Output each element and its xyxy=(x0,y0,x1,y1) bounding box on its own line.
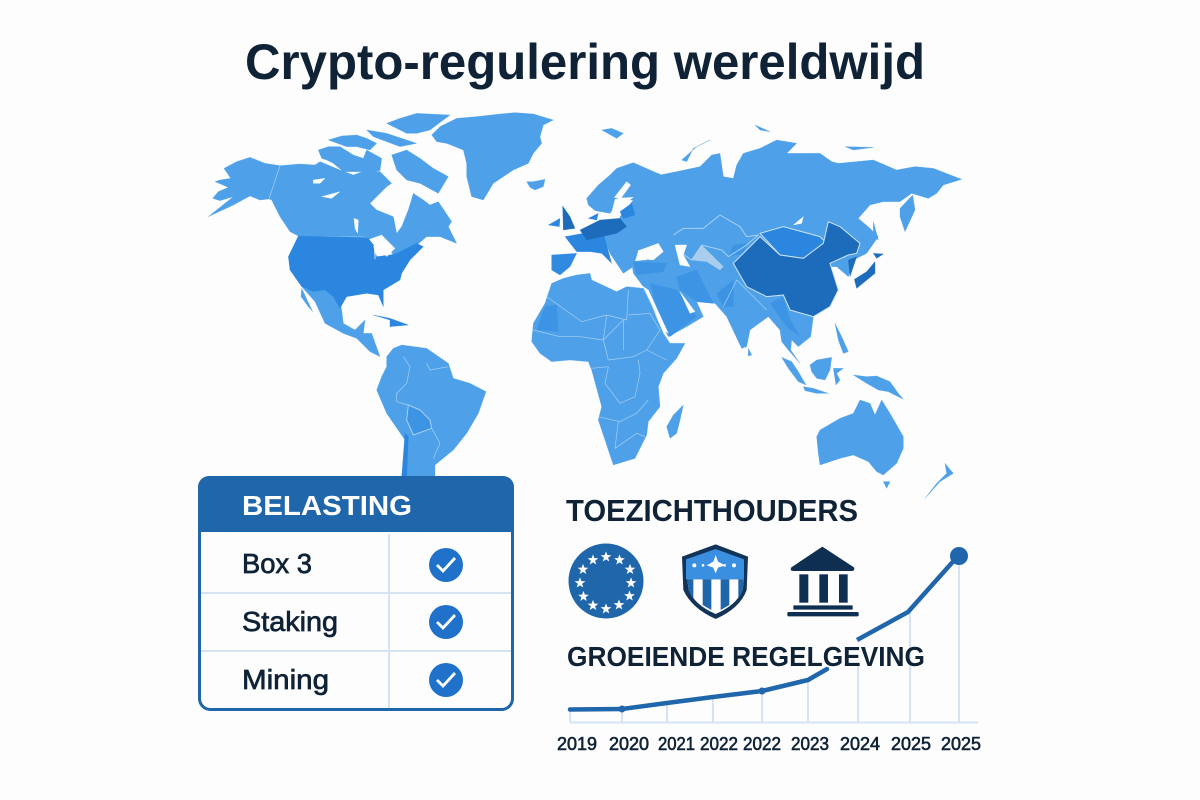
heading: groeiende regelgeving: GROEIENDE REGELGEVING xyxy=(567,641,925,672)
table header xyxy=(198,476,514,532)
water: Black Sea, Caspian Sea, Red Sea, Persian Gulf, Baltic xyxy=(638,243,663,260)
row: Box 3: Box 3 xyxy=(242,548,312,579)
panel: belasting table xyxy=(198,476,514,710)
China xyxy=(733,222,860,317)
map: Europe, Asia, Africa, Oceania xyxy=(532,125,962,498)
Western Europe xyxy=(552,253,577,275)
axis labels: years: 2025 xyxy=(891,734,931,754)
axis labels: years: 2022 xyxy=(700,734,738,754)
axis labels: years xyxy=(557,734,981,754)
Japan xyxy=(854,262,875,288)
world map xyxy=(208,113,962,498)
axis labels: years: 2025 xyxy=(941,734,981,754)
Africa xyxy=(532,273,685,465)
axis labels: years: 2021 xyxy=(658,734,695,754)
row: Staking: Staking xyxy=(242,606,338,637)
map: Americas and Greenland xyxy=(208,113,553,478)
Southeast Asia and Oceania xyxy=(782,357,806,385)
icon: EU stars xyxy=(568,544,644,618)
icon: shield xyxy=(682,544,748,619)
line chart: groeiende regelgeving xyxy=(557,547,981,754)
title: Crypto-regulering wereldwijd xyxy=(245,34,925,90)
axis labels: years: 2019 xyxy=(557,734,597,754)
axis labels: years: 2023 xyxy=(791,734,829,754)
Mongolia xyxy=(760,227,827,258)
row: Mining xyxy=(242,663,463,697)
row: Mining: Mining xyxy=(242,664,329,695)
axis labels: years: 2022 xyxy=(743,734,781,754)
axis labels: years: 2024 xyxy=(840,734,880,754)
Middle East xyxy=(650,283,697,337)
axis labels: years: 2020 xyxy=(609,734,649,754)
table header: BELASTING xyxy=(242,490,412,521)
icon: bank building xyxy=(787,547,859,616)
row: Staking xyxy=(242,605,463,639)
row: Box 3 xyxy=(242,548,463,582)
heading: toezichthouders: TOEZICHTHOUDERS xyxy=(566,493,858,528)
